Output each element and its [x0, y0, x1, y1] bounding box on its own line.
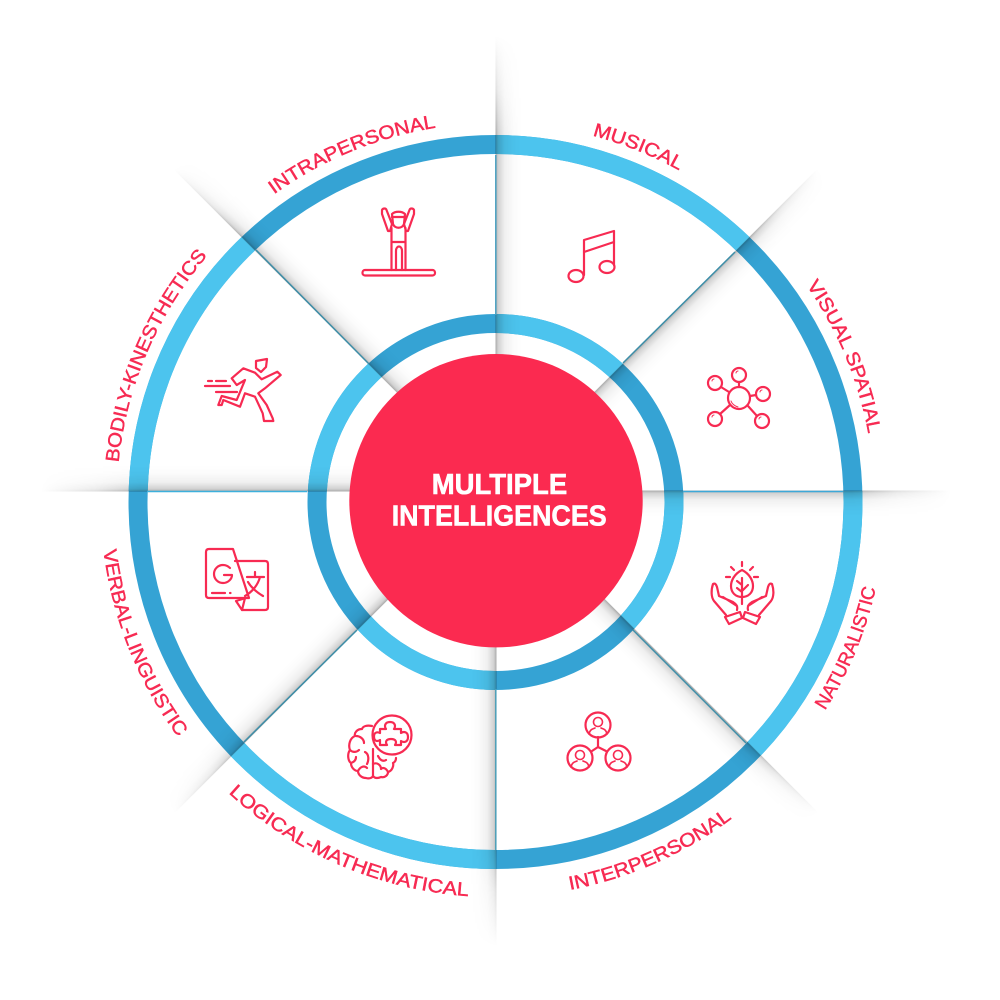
- title: INTELLIGENCES: [392, 501, 607, 533]
- center circle with title: [349, 354, 643, 647]
- icon: running person: [205, 359, 281, 421]
- label: visual spatial: VISUAL SPATIAL: [810, 278, 880, 434]
- title: MULTIPLE: [432, 469, 567, 501]
- label: naturalistic: NATURALISTIC: [814, 586, 875, 710]
- label: intrapersonal: INTRAPERSONAL: [268, 116, 436, 194]
- icon: hands holding a leaf: [712, 562, 773, 624]
- icon: person with raised arms on a platform: [362, 208, 435, 276]
- inner ring: [317, 324, 674, 680]
- icon: three connected people: [568, 712, 630, 770]
- icon: translation cards: [206, 549, 268, 610]
- label: verbal-linguistic: VERBAL-LINGUISTIC: [104, 548, 187, 735]
- outer ring: [138, 144, 853, 860]
- label: bodily-kinesthetics: BODILY-KINESTHETICS: [106, 250, 206, 462]
- title: [392, 469, 607, 533]
- label: interpersonal: INTERPERSONAL: [569, 812, 732, 890]
- label: logical-mathematical: LOGICAL-MATHEMATICAL: [229, 784, 468, 896]
- icon: brain with puzzle piece: [348, 716, 412, 778]
- label: musical: MUSICAL: [594, 123, 680, 170]
- icon: music notes: [568, 231, 614, 282]
- icon: network of circles: [708, 368, 770, 428]
